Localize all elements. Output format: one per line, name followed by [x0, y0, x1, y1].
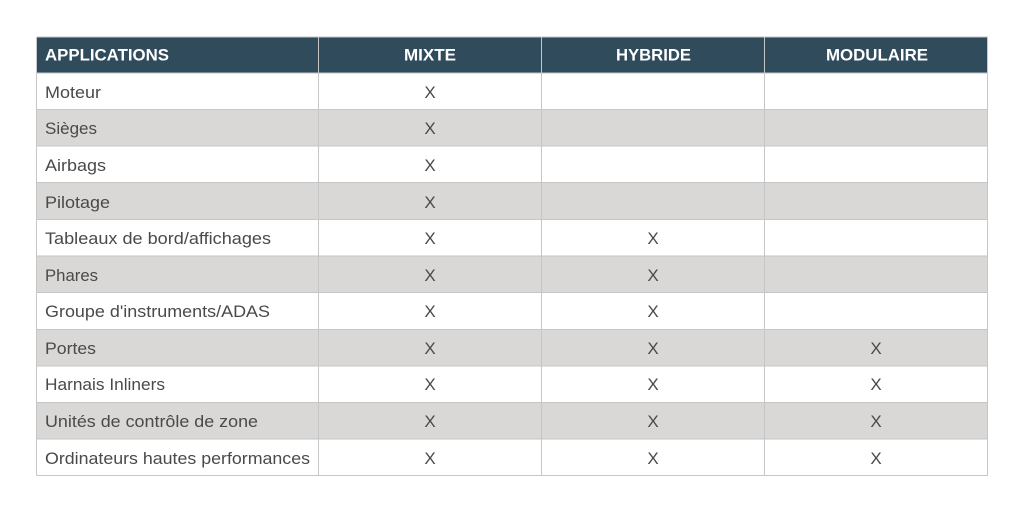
row: harnais inliners: X	[647, 375, 659, 394]
heading: hybride: HYBRIDE	[616, 46, 691, 64]
row: airbags: Airbags	[45, 156, 106, 175]
row: sièges	[45, 119, 436, 138]
row: ordinateurs hautes performances: Ordinateurs hautes performances	[45, 449, 310, 468]
row: airbags	[45, 156, 436, 175]
heading: applications: APPLICATIONS	[45, 46, 169, 64]
row: harnais inliners: X	[870, 375, 882, 394]
row: ordinateurs hautes performances: X	[870, 449, 882, 468]
row: moteur	[45, 83, 436, 102]
row: airbags: X	[424, 156, 436, 175]
row: phares: Phares	[45, 266, 98, 285]
row: unités de contrôle de zone: X	[647, 412, 659, 431]
row: portes: X	[424, 339, 436, 358]
row: portes	[45, 339, 882, 358]
row: groupe d'instruments: Groupe d'instruments/ADAS	[45, 302, 270, 321]
row: tableaux de bord: Tableaux de bord/affichages	[45, 229, 271, 248]
row: phares: X	[647, 266, 659, 285]
heading: mixte: MIXTE	[404, 46, 456, 64]
row: ordinateurs hautes performances: X	[424, 449, 436, 468]
row: tableaux de bord: X	[647, 229, 659, 248]
row: pilotage: Pilotage	[45, 193, 110, 212]
heading: modulaire: MODULAIRE	[826, 46, 928, 64]
row: portes: Portes	[45, 339, 96, 358]
row: tableaux de bord	[45, 229, 659, 248]
row: moteur: X	[424, 83, 436, 102]
row: pilotage: X	[424, 193, 436, 212]
row: harnais inliners: Harnais Inliners	[45, 375, 165, 394]
row: groupe d'instruments: X	[647, 302, 659, 321]
row: sièges: Sièges	[45, 119, 97, 138]
row: harnais inliners	[45, 375, 882, 394]
row: ordinateurs hautes performances	[45, 449, 882, 468]
row: phares: X	[424, 266, 436, 285]
row: unités de contrôle de zone: X	[870, 412, 882, 431]
row: tableaux de bord: X	[424, 229, 436, 248]
row: groupe d'instruments: X	[424, 302, 436, 321]
row: pilotage	[45, 193, 436, 212]
row: sièges: X	[424, 119, 436, 138]
row: moteur: Moteur	[45, 83, 101, 102]
row: groupe d'instruments	[45, 302, 659, 321]
header row	[36, 37, 988, 73]
row: ordinateurs hautes performances: X	[647, 449, 659, 468]
row: unités de contrôle de zone: X	[424, 412, 436, 431]
row: unités de contrôle de zone: Unités de contrôle de zone	[45, 412, 258, 431]
row: portes: X	[647, 339, 659, 358]
row: portes: X	[870, 339, 882, 358]
row: phares	[45, 266, 659, 285]
row: harnais inliners: X	[424, 375, 436, 394]
row: unités de contrôle de zone	[45, 412, 882, 431]
